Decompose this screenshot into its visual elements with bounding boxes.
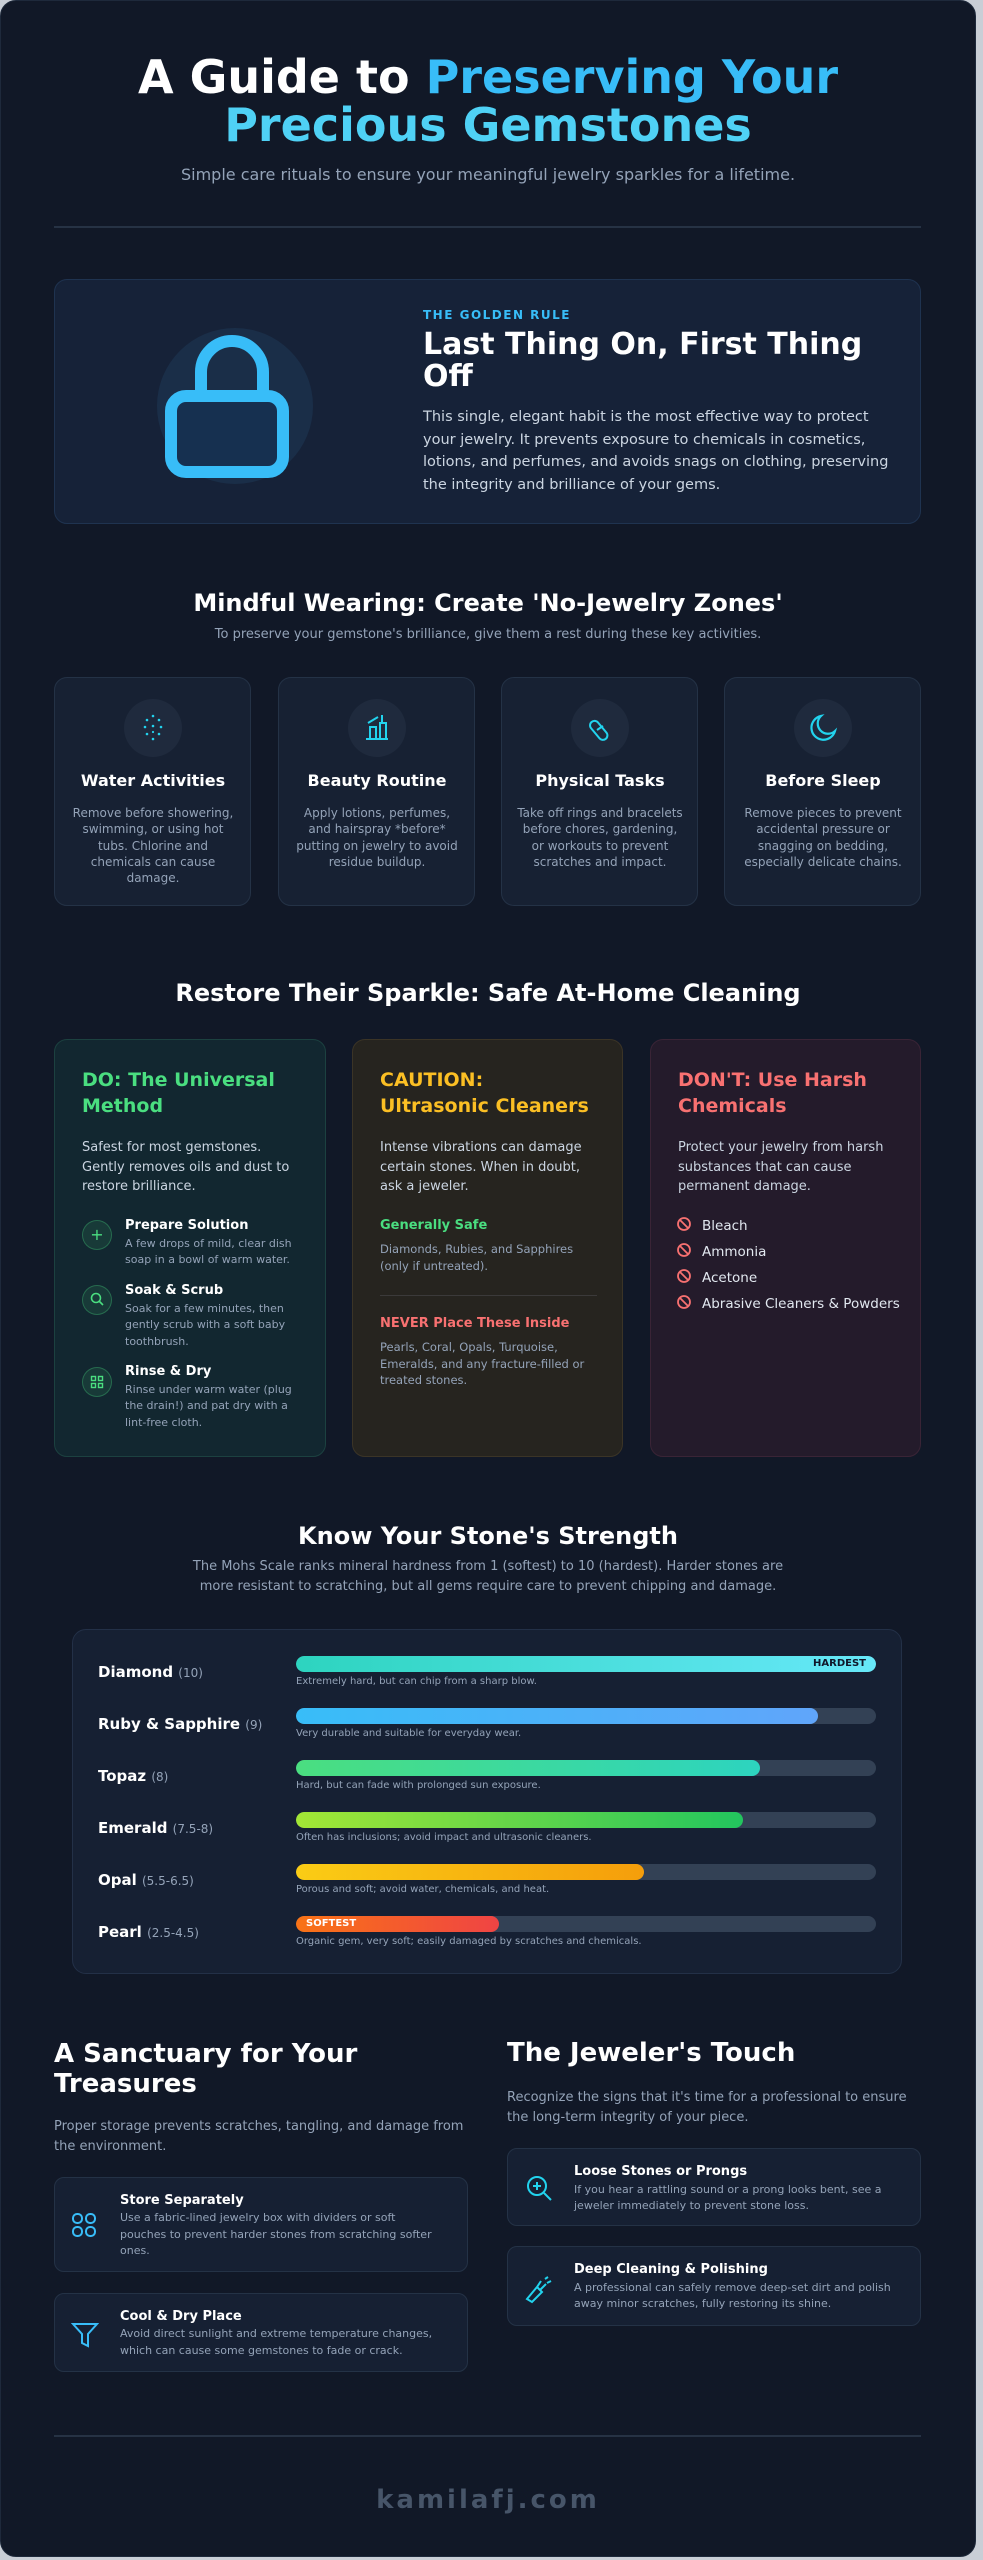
step: prepare: + [90,1225,104,1244]
card: deep cleaning: A professional can safely remove deep-set dirt and polish away minor scratches, fully restoring its shine. [574,2281,891,2310]
text: HARDEST [813,1658,866,1669]
panel: water activities: Remove before showering, swimming, or using hot tubs. Chlorine and chemicals can cause damage. [73,806,233,885]
panel: physical tasks: before chores, gardening, [523,822,677,836]
heading: mindful wearing: Mindful Wearing: Create 'No-Jewelry Zones' [193,589,783,617]
text: Emerald (7.5-8) [98,1819,213,1837]
card: loose stones [507,2148,921,2226]
heading: restore sparkle: Restore Their Sparkle: Safe At-Home Cleaning [175,979,801,1007]
panel: don't: Protect your jewelry from harsh substances that can cause permanent damage. [678,1140,883,1194]
card: loose stones: If you hear a rattling sound or a prong looks bent, see a jeweler immediately to prevent stone loss. [574,2183,881,2212]
text: Often has inclusions; avoid impact and ultrasonic cleaners. [296,1832,592,1843]
subtitle: Simple care rituals to ensure your meaningful jewelry sparkles for a lifetime. [181,165,795,184]
panel: water activities [54,677,251,906]
list: chemicals [677,1217,900,1312]
generally safe [380,1218,573,1273]
section: jeweler's touch [507,2038,921,2326]
text: Pearl (2.5-4.5) [98,1923,199,1941]
card: deep cleaning: Deep Cleaning & Polishing [574,2262,768,2277]
text block: the integrity and brilliance of your gems. [423,477,720,493]
title: Precious Gemstones [224,98,752,152]
step: prepare [82,1218,292,1266]
step: rinse: Rinse & Dry [125,1364,211,1379]
generally safe: Diamonds, Rubies, and Sapphires (only if untreated). [380,1242,573,1273]
never place: NEVER Place These Inside [380,1316,569,1331]
heading: The Jeweler's Touch [507,2038,795,2068]
panel: caution [352,1039,623,1457]
text: Topaz (8) [98,1767,168,1785]
panel: do: Safest for most gemstones. Gently removes oils and dust to restore brilliance. [82,1140,289,1194]
panel: water activities: Water Activities [81,771,225,790]
panel: beauty routine: Apply lotions, perfumes, and hairspray *before* putting on jewelry to avoid residue buildup. [296,806,458,869]
title: A Guide to Preserving Your [138,50,838,104]
panel: physical tasks [501,677,698,906]
panel: don't [650,1039,921,1457]
list: chemicals: Bleach [702,1218,748,1234]
card: loose stones: Loose Stones or Prongs [574,2164,747,2179]
never place [380,1316,584,1387]
card: store separately: Store Separately [120,2193,244,2208]
icon: bandage [571,699,629,757]
panel: physical tasks: Take off rings and bracelets [517,806,683,820]
icon: beauty [348,699,406,757]
text: Extremely hard, but can chip from a sharp blow. [296,1676,537,1687]
step: soak [82,1283,285,1348]
card: store separately: Use a fabric-lined jewelry box with dividers or soft pouches to prevent harder stones from scratching softer ones. [120,2211,432,2257]
panel: golden rule [54,279,921,524]
text: Proper storage prevents scratches, tangling, and damage from the environment. [54,2119,463,2154]
text: SOFTEST [306,1918,356,1929]
panel: don't: DON'T: Use Harsh Chemicals [678,1069,867,1117]
panel: physical tasks: Physical Tasks [535,771,665,790]
panel: before sleep: Before Sleep [765,771,881,790]
step: rinse: Rinse under warm water (plug the drain!) and pat dry with a lint-free cloth. [125,1383,292,1429]
step: rinse [82,1364,292,1429]
label: the golden rule: THE GOLDEN RULE [423,308,571,322]
panel: physical tasks: or workouts to prevent [532,839,668,853]
text: Diamond (10) [98,1663,203,1681]
text block [422,409,888,493]
text: Hard, but can fade with prolonged sun exposure. [296,1780,541,1791]
panel: beauty routine [278,677,475,906]
subheading: To preserve your gemstone's brilliance, give them a rest during these key activities. [215,627,761,642]
chart: mohs hardness bars [72,1629,902,1974]
card: store separately [54,2177,468,2272]
card: cool & dry: Avoid direct sunlight and extreme temperature changes, which can cause some gemstones to fade or crack. [120,2327,432,2356]
heading: stone strength: Know Your Stone's Strength [298,1522,678,1550]
panel: caution: CAUTION: [380,1069,483,1091]
heading: A Sanctuary for Your Treasures [54,2039,357,2099]
list: chemicals: Abrasive Cleaners & Powders [702,1296,900,1312]
step: prepare: Prepare Solution [125,1218,248,1233]
panel: beauty routine: Beauty Routine [308,771,446,790]
panel: before sleep: Remove pieces to prevent accidental pressure or snagging on bedding, especially delicate chains. [744,806,902,869]
panel: physical tasks: scratches and impact. [534,855,666,869]
heading: Last Thing On, First Thing Off [423,327,862,394]
icon: lock [157,328,313,484]
card: cool & dry [54,2293,468,2372]
step: prepare: A few drops of mild, clear dish soap in a bowl of warm water. [125,1237,292,1266]
text: Porous and soft; avoid water, chemicals, and heat. [296,1884,549,1895]
text block: lotions, and perfumes, and avoids snags on clothing, preserving [423,454,888,470]
icon: moon [794,699,852,757]
text: Ruby & Sapphire (9) [98,1715,262,1733]
panel: do: DO: The Universal Method [82,1069,275,1117]
text block: your jewelry. It prevents exposure to chemicals in cosmetics, [423,432,865,448]
text block: This single, elegant habit is the most effective way to protect [423,409,869,425]
footer: brand: kamilafj.com [376,2485,600,2515]
text: Opal (5.5-6.5) [98,1871,194,1889]
section: sanctuary [54,2039,468,2372]
panel: before sleep [724,677,921,906]
text: Organic gem, very soft; easily damaged by scratches and chemicals. [296,1936,642,1947]
card: cool & dry: Cool & Dry Place [120,2309,242,2324]
step: soak: Soak for a few minutes, then gently scrub with a soft baby toothbrush. [125,1302,285,1348]
generally safe: Generally Safe [380,1218,487,1233]
step: soak: Soak & Scrub [125,1283,223,1298]
icon: water [124,699,182,757]
list: chemicals: Ammonia [702,1244,766,1260]
title [138,50,838,152]
panel: caution: Intense vibrations can damage certain stones. When in doubt, ask a jeweler. [380,1140,582,1194]
text: mohs description: The Mohs Scale ranks mineral hardness from 1 (softest) to 10 (hardest). Harder stones are more resistant to scratching, but all gems require care to prevent chipping and damage. [193,1559,783,1594]
text: Very durable and suitable for everyday wear. [296,1728,521,1739]
text: Recognize the signs that it's time for a professional to ensure the long-term integrity of your piece. [507,2090,907,2125]
never place: Pearls, Coral, Opals, Turquoise, Emeralds, and any fracture-filled or treated stones. [380,1340,584,1387]
card: deep cleaning [507,2246,921,2326]
list: chemicals: Acetone [702,1270,757,1286]
panel: do [54,1039,326,1457]
panel: caution: Ultrasonic Cleaners [380,1095,589,1117]
